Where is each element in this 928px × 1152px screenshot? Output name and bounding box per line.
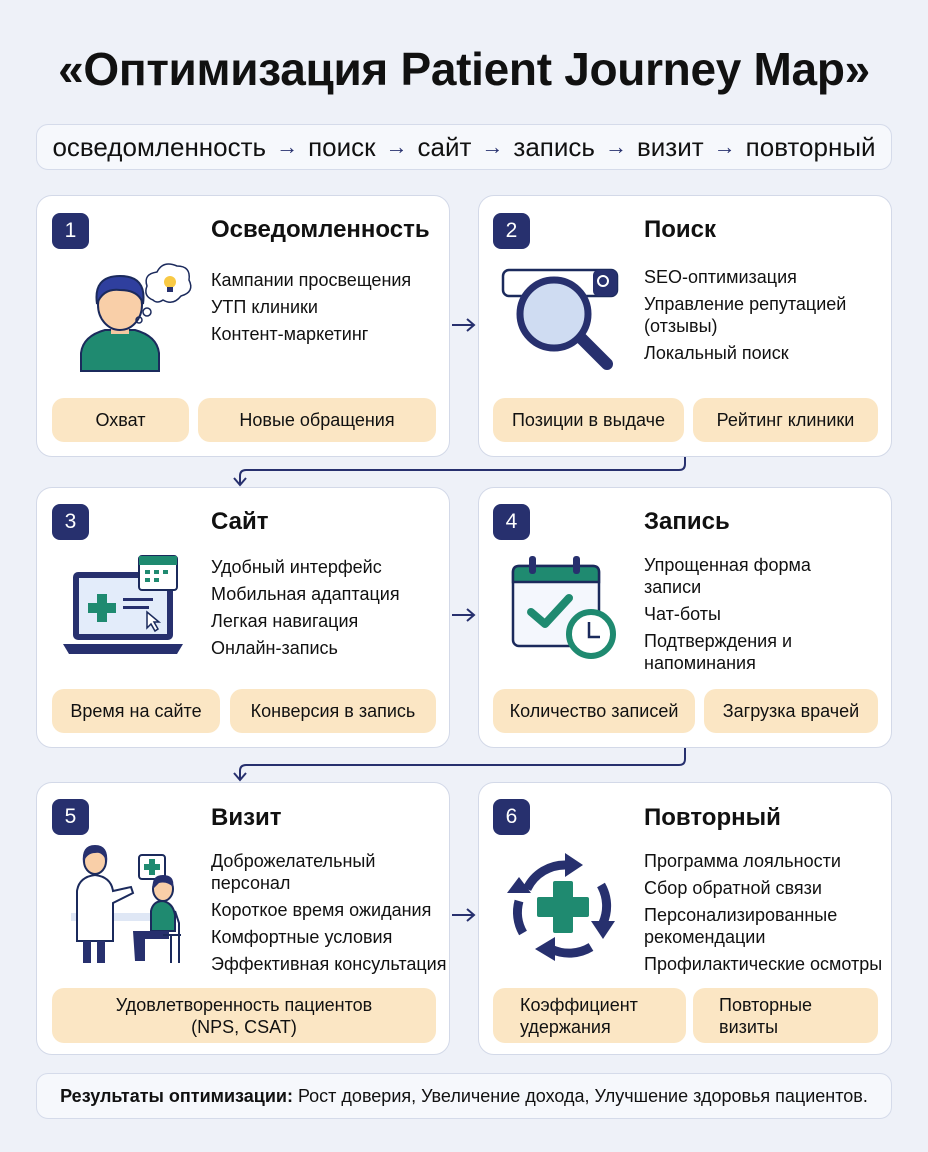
list 6: Программа лояльности <box>644 851 841 871</box>
pill: satisfaction: (NPS, CSAT) <box>191 1016 297 1036</box>
pill: new requests <box>198 398 436 442</box>
icon: person thinking <box>80 263 192 372</box>
panel: 5 visit <box>36 782 450 1055</box>
list 3: Мобильная адаптация <box>211 584 400 604</box>
list 2: Управление репутацией <box>644 294 846 314</box>
list 5: Комфортные условия <box>211 927 392 947</box>
flow bar: запись <box>513 132 595 162</box>
heading 6: Повторный <box>644 804 781 831</box>
badge 5: 5 <box>65 805 76 828</box>
list 3: Удобный интерфейс <box>211 557 382 577</box>
heading 3: Сайт <box>211 508 268 535</box>
panel: 1 awareness <box>36 195 450 457</box>
title: «Оптимизация Patient Journey Map» <box>58 43 870 95</box>
panel: 6 repeat <box>478 782 892 1055</box>
flow bar: → <box>605 134 627 159</box>
flow bar: → <box>276 134 298 159</box>
list 6: Профилактические осмотры <box>644 954 882 974</box>
list 4 <box>644 555 811 673</box>
list 5: Эффективная консультация <box>211 954 446 974</box>
pill: rating <box>693 398 878 442</box>
list 4: Чат-боты <box>644 604 721 624</box>
list 5 <box>211 851 446 974</box>
list 2 <box>644 267 846 363</box>
heading 2: Поиск <box>644 216 716 243</box>
pill: time on site: Время на сайте <box>70 701 202 721</box>
list 4: Упрощенная форма <box>644 555 811 575</box>
pill: retention: удержания <box>520 1016 611 1036</box>
panel: 4 booking <box>478 487 892 748</box>
badge 3 <box>52 504 89 540</box>
pill: rating: Рейтинг клиники <box>717 410 854 430</box>
flow bar: → <box>481 134 503 159</box>
footer <box>36 1073 892 1119</box>
list 4: напоминания <box>644 653 756 673</box>
list 6: рекомендации <box>644 927 765 947</box>
pill: doctor load: Загрузка врачей <box>723 701 859 721</box>
icon: calendar check <box>512 556 616 659</box>
pill: satisfaction <box>52 988 436 1043</box>
list 5: Короткое время ожидания <box>211 900 431 920</box>
badge 6 <box>493 799 530 835</box>
badge 6: 6 <box>506 805 517 828</box>
pill: reach <box>52 398 189 442</box>
list 1 <box>211 270 411 344</box>
pill: repeat visits: визиты <box>719 1016 778 1036</box>
list 3: Легкая навигация <box>211 611 358 631</box>
heading 5: Визит <box>211 804 282 831</box>
list 1: Контент-маркетинг <box>211 324 368 344</box>
list 3 <box>211 557 400 658</box>
list 2: (отзывы) <box>644 316 718 336</box>
flow bar: → <box>714 134 736 159</box>
flow bar <box>36 124 892 170</box>
flow bar: повторный <box>746 132 876 162</box>
pill: satisfaction: Удовлетворенность пациентов <box>116 994 372 1014</box>
pill: bookings count <box>493 689 695 733</box>
badge 2 <box>493 213 530 249</box>
pill: retention <box>493 988 686 1043</box>
badge 2: 2 <box>506 219 517 242</box>
flow bar: осведомленность <box>52 132 266 162</box>
list 2: SEO-оптимизация <box>644 267 797 287</box>
pill: new requests: Новые обращения <box>239 410 395 430</box>
pill: bookings count: Количество записей <box>510 701 678 721</box>
flow bar: → <box>386 134 408 159</box>
pill: conversion: Конверсия в запись <box>251 701 415 721</box>
list 1: УТП клиники <box>211 297 318 317</box>
pill: reach: Охват <box>95 410 146 430</box>
list 5: Доброжелательный <box>211 851 375 871</box>
badge 1: 1 <box>65 219 76 242</box>
badge 4 <box>493 504 530 540</box>
pill: retention: Коэффициент <box>520 994 638 1014</box>
heading 4: Запись <box>644 508 730 535</box>
list 6: Сбор обратной связи <box>644 878 822 898</box>
list 2: Локальный поиск <box>644 343 789 363</box>
icon: laptop <box>63 555 183 654</box>
list 6 <box>644 851 882 974</box>
list 6: Персонализированные <box>644 905 837 925</box>
panel: 3 site <box>36 487 450 748</box>
flow bar: сайт <box>418 132 471 162</box>
list 4: записи <box>644 577 701 597</box>
pill: time on site <box>52 689 220 733</box>
panel: 2 search <box>478 195 892 457</box>
badge 1 <box>52 213 89 249</box>
badge 5 <box>52 799 89 835</box>
pill: repeat visits: Повторные <box>719 994 812 1014</box>
badge 3: 3 <box>65 510 76 533</box>
footer: Результаты оптимизации: Рост доверия, Увеличение дохода, Улучшение здоровья пациентов. <box>60 1086 868 1106</box>
pill: repeat visits <box>693 988 878 1043</box>
flow bar: поиск <box>308 132 376 162</box>
icon: cycle cross <box>507 853 615 961</box>
icon: doctor and patient <box>71 845 181 963</box>
list 3: Онлайн-запись <box>211 638 338 658</box>
list 4: Подтверждения и <box>644 631 792 651</box>
pill: ranking: Позиции в выдаче <box>512 410 665 430</box>
flow bar: визит <box>637 132 704 162</box>
pill: ranking <box>493 398 684 442</box>
list 1: Кампании просвещения <box>211 270 411 290</box>
pill: doctor load <box>704 689 878 733</box>
list 5: персонал <box>211 873 290 893</box>
heading 1: Осведомленность <box>211 216 430 243</box>
icon: search <box>502 268 618 370</box>
pill: conversion <box>230 689 436 733</box>
badge 4: 4 <box>506 510 517 533</box>
